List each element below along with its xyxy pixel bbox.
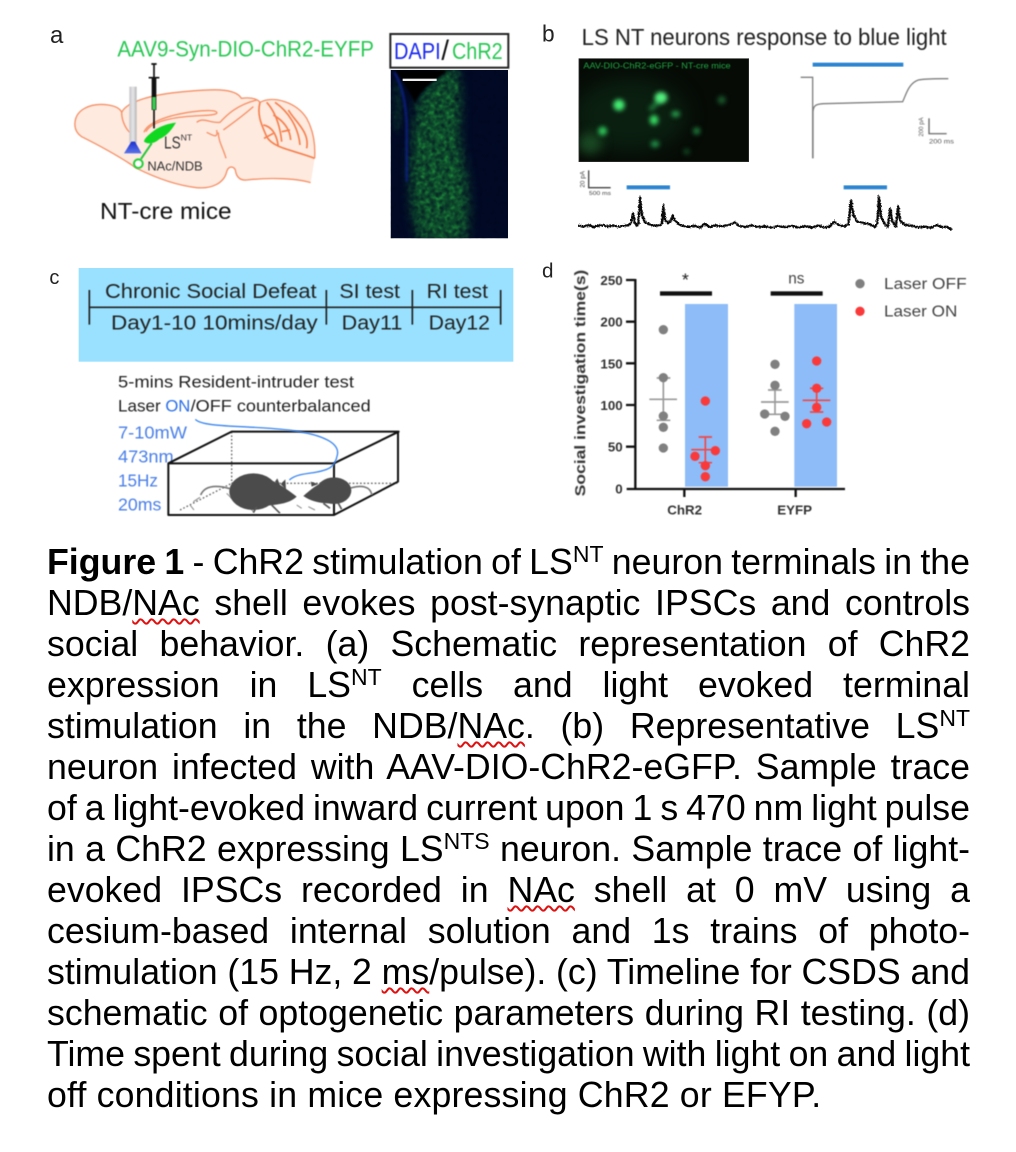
legend: Laser OFF [884, 276, 967, 293]
experiment timeline: SI test [339, 280, 400, 303]
legend [855, 276, 967, 321]
histology label box: DAPI [394, 38, 441, 64]
figure caption: evoked IPSCs recorded in NAc shell at 0 mV using a [47, 870, 970, 910]
fluorescence micrograph [573, 58, 749, 162]
panel letter d: d [542, 260, 553, 283]
figure caption: Figure 1 - ChR2 stimulation of LSNT neuron terminals in the [47, 541, 970, 582]
mouse line label: NT-cre mice [100, 198, 232, 224]
optic fiber with blue light cone [124, 87, 142, 153]
y axis tick labels: 250 [600, 273, 623, 288]
figure caption: expression in LSNT cells and light evoked terminal [47, 664, 970, 705]
panel c: timeline and test schematic [49, 267, 513, 515]
test description: /OFF counterbalanced [191, 396, 371, 415]
ChR2 laser off data [649, 325, 677, 453]
axes [626, 279, 845, 497]
figure caption: Time spent during social investigation with light on and light [47, 1034, 970, 1074]
laser parameters: 15Hz [118, 471, 158, 491]
legend: Laser ON [884, 304, 957, 321]
y axis tick labels: 100 [600, 398, 623, 413]
current trace scale bar: 200 pA [918, 117, 925, 137]
IPSC trace scale bar [580, 170, 611, 197]
laser-on shaded bars [685, 304, 837, 487]
significance: ChR2 [660, 270, 712, 296]
figure caption: cesium-based internal solution and 1s trains of photo- [47, 911, 970, 951]
figure caption: neuron infected with AAV-DIO-ChR2-eGFP. Sample trace [47, 747, 970, 787]
figure caption: social behavior. (a) Schematic representation of ChR2 [47, 624, 970, 664]
experiment timeline [89, 280, 501, 334]
sagittal mouse brain schematic [75, 90, 315, 188]
panel letter b: b [542, 21, 555, 47]
y axis tick labels: 0 [615, 482, 623, 497]
ChR2 laser on data [690, 396, 720, 481]
panel letter a: a [50, 22, 64, 49]
figure caption [47, 541, 970, 1115]
LS NT label: LS [164, 132, 181, 152]
experiment timeline: Day11 [342, 311, 402, 334]
IPSC trace scale bar: 500 ms [589, 191, 611, 197]
test description: Laser [118, 396, 161, 415]
panel letter c: c [49, 267, 59, 289]
figure caption: in a ChR2 expressing LSNTS neuron. Sample trace of light- [47, 828, 970, 869]
significance: ChR2: * [682, 270, 689, 290]
resident mouse [201, 473, 297, 513]
LS NT superscript: NT [181, 132, 193, 142]
x axis labels: EYFP [777, 502, 812, 517]
EYFP laser on data [802, 356, 831, 428]
figure caption: NDB/NAc shell evokes post-synaptic IPSCs and controls [47, 583, 970, 623]
light pulse bars: trains [627, 185, 887, 189]
histology label box [390, 34, 508, 68]
panel b: light responses [542, 21, 954, 230]
figure caption: off conditions in mice expressing ChR2 or EFYP. [47, 1075, 821, 1115]
y axis tick labels: 50 [608, 440, 623, 455]
laser parameters: 7-10mW [118, 422, 188, 442]
figure caption: stimulation (15 Hz, 2 ms/pulse). (c) Timeline for CSDS and [47, 952, 970, 992]
experiment timeline: Day1-10 10mins/day [111, 311, 318, 334]
y axis tick labels: 200 [600, 315, 623, 330]
EYFP laser off data [760, 360, 790, 436]
behaviour box [168, 432, 399, 515]
green LS neurons and projection [134, 123, 176, 168]
x axis labels: ChR2 [667, 502, 702, 517]
viral construct label: AAV9-Syn-DIO-ChR2-EYFP [117, 37, 374, 62]
panel b title: LS NT neurons response to blue light [582, 24, 947, 50]
laser parameters: 473nm [118, 447, 174, 467]
inward current trace [801, 77, 948, 158]
y axis tick labels: 150 [600, 356, 623, 371]
intruder mouse [303, 477, 372, 509]
figure caption: stimulation in the NDB/NAc. (b) Representative LSNT [47, 705, 970, 746]
experiment timeline: Chronic Social Defeat [105, 280, 317, 303]
histology micrograph [391, 70, 508, 238]
x axis labels [667, 502, 812, 517]
panel d: social investigation chart [542, 260, 967, 517]
histology label box: ChR2 [452, 38, 503, 64]
test description [118, 373, 371, 415]
significance: EYFP: ns [788, 271, 805, 288]
test description: ON [165, 396, 190, 415]
laser parameters [118, 422, 188, 514]
experiment timeline: RI test [427, 280, 488, 303]
test description: 5-mins Resident-intruder test [118, 373, 354, 392]
timeline background band [79, 268, 513, 362]
fluorescence micrograph: AAV-DIO-ChR2-eGFP - NT-cre mice [583, 62, 731, 71]
y axis title: Social investigation time(s) [573, 269, 589, 496]
figure caption: schematic of optogenetic parameters during RI testing. (d) [47, 993, 970, 1033]
figure panels [49, 21, 967, 517]
NAc/NDB label: NAc/NDB [147, 160, 203, 174]
optical fiber cable [195, 419, 338, 480]
figure caption: of a light-evoked inward current upon 1 s 470 nm light pulse [47, 788, 970, 828]
experiment timeline: Day12 [429, 311, 490, 334]
IPSC trace [579, 196, 952, 230]
light pulse bar: long [813, 63, 903, 67]
current trace scale bar [918, 117, 954, 146]
laser parameters: 20ms [118, 494, 162, 514]
IPSC trace scale bar: 20 pA [580, 171, 586, 188]
current trace scale bar: 200 ms [929, 139, 954, 146]
panel a: viral injection and expression [50, 22, 508, 238]
y axis tick labels [600, 273, 623, 497]
injection syringe [149, 63, 159, 128]
histology label box: / [441, 35, 449, 66]
significance: EYFP [771, 271, 823, 296]
